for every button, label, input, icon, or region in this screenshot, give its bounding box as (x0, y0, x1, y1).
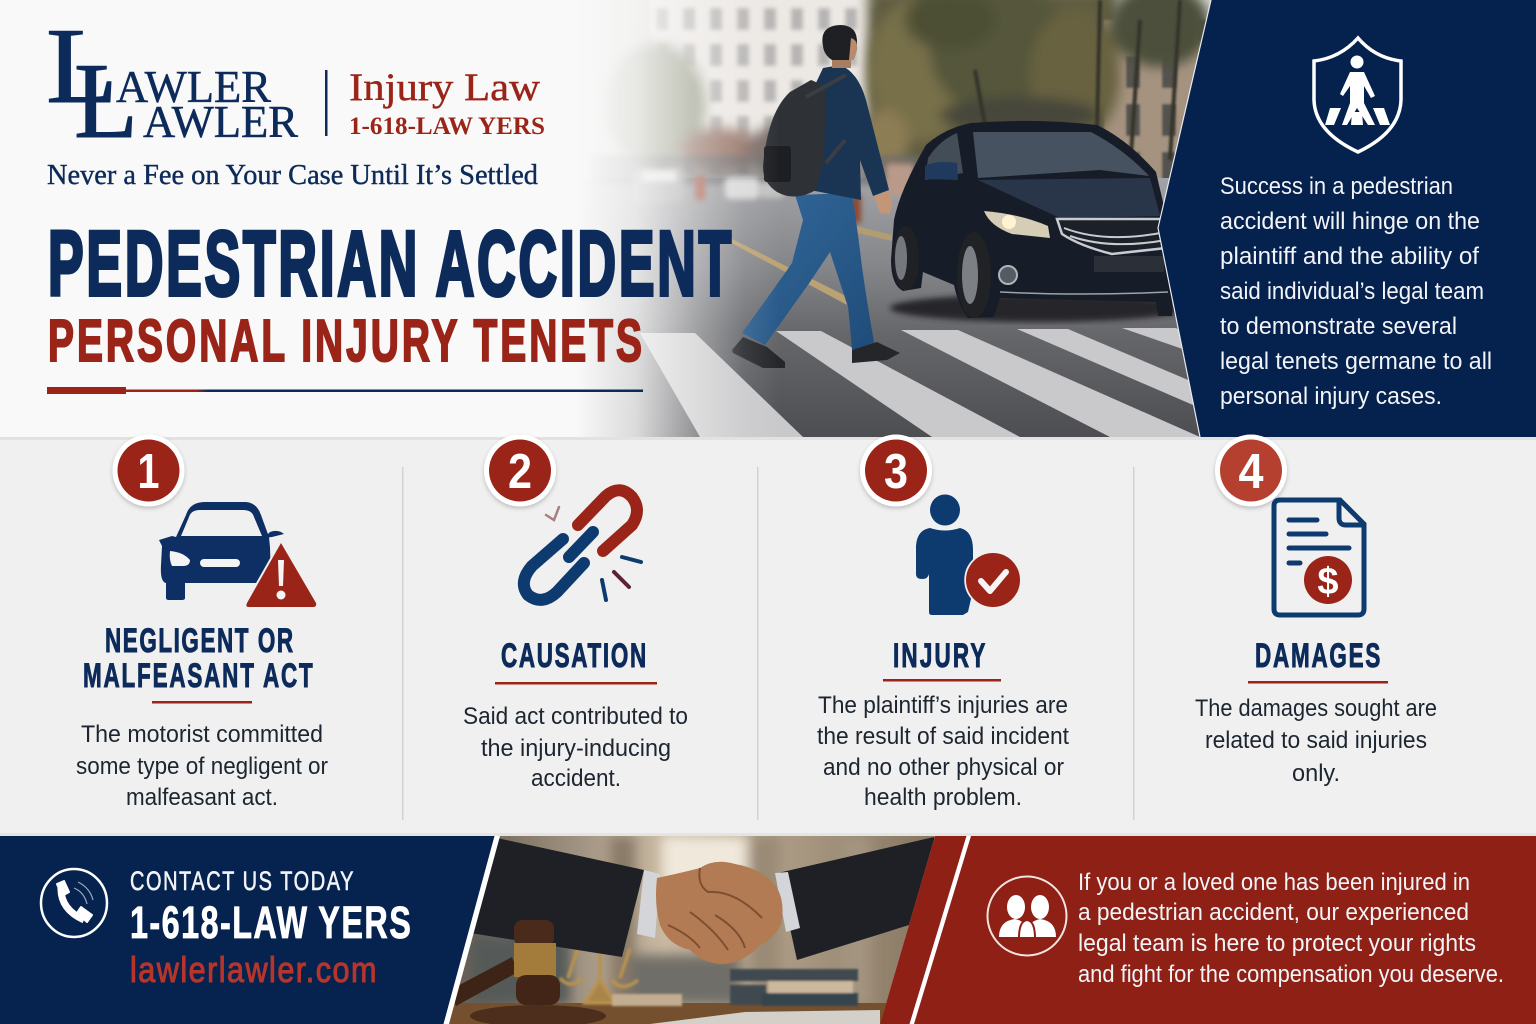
description (76, 721, 328, 811)
tenet panel top edge (0, 437, 1536, 440)
number badge 4: 4 (1238, 445, 1264, 499)
description (817, 692, 1069, 811)
tagline: Never a Fee on Your Case Until It’s Settled (47, 160, 538, 191)
intro paragraph: legal tenets germane to all (1220, 348, 1492, 375)
logo: Lawler Lawler: L (74, 42, 138, 161)
right sleeve (778, 837, 940, 960)
description: health problem. (864, 784, 1022, 811)
tenet 3: injury (817, 434, 1069, 811)
footer photo: handshake and gavel (440, 836, 940, 1024)
heading rule (152, 701, 252, 704)
heading rule (495, 682, 657, 684)
footer navy contact panel (0, 836, 497, 1024)
contact details: lawlerlawler.com (130, 951, 377, 991)
column dividers (402, 467, 1134, 820)
heading rule (883, 679, 1001, 682)
title: PERSONAL INJURY TENETS (48, 308, 642, 374)
logo: Lawler Lawler (46, 7, 545, 161)
description: malfeasant act. (126, 784, 278, 811)
description: only. (1292, 760, 1340, 787)
number badge 4 (1215, 434, 1287, 506)
left shirt cuff (637, 870, 660, 938)
hand (874, 191, 892, 214)
slash: white divider left (444, 836, 500, 1024)
number badge 1: 1 (138, 445, 160, 499)
number badge 1 (112, 434, 184, 506)
car (890, 121, 1190, 322)
tenet 1: negligent or malfeasant act (76, 434, 328, 811)
heading rule (1248, 681, 1388, 684)
description: Said act contributed to (463, 703, 688, 730)
intro paragraph (1220, 173, 1492, 410)
heading: DAMAGES (1255, 637, 1380, 675)
heading (83, 622, 313, 695)
icon: car with warning triangle (159, 502, 316, 607)
closing message: legal team is here to protect your rights (1078, 930, 1476, 957)
description: accident. (531, 765, 621, 792)
description: related to said injuries (1205, 727, 1427, 754)
intro paragraph: accident will hinge on the (1220, 208, 1480, 235)
desk (449, 1003, 886, 1024)
tenet 2: causation (463, 434, 688, 792)
description: The motorist committed (81, 721, 323, 748)
jeans (742, 193, 875, 350)
heading: MALFEASANT ACT (83, 657, 313, 695)
intro paragraph: said individual’s legal team (1220, 278, 1484, 305)
heading: INJURY (893, 637, 985, 675)
navy intro panel (1158, 0, 1536, 437)
photo fade into white (540, 0, 780, 437)
icon: document with dollar sign (1274, 500, 1364, 615)
paper on desk (650, 1010, 880, 1024)
closing message: and fight for the compensation you deserve. (1078, 961, 1504, 988)
description: some type of negligent or (76, 753, 328, 780)
number badge 3 (860, 434, 932, 506)
icon: family in circle (988, 876, 1066, 956)
photo backdrop: buildings, trees, street (540, 0, 1220, 437)
closing message: a pedestrian accident, our experienced (1078, 899, 1469, 926)
icon: phone in circle (41, 869, 107, 937)
intro paragraph: Success in a pedestrian (1220, 173, 1453, 200)
heading: NEGLIGENT OR (105, 622, 293, 660)
books (612, 969, 858, 1006)
icon: shield with pedestrian (1314, 38, 1401, 152)
hero panel background (0, 0, 1536, 438)
description (463, 703, 688, 792)
shoes (732, 337, 785, 368)
description: The plaintiff’s injuries are (818, 692, 1068, 719)
right shirt cuff (775, 872, 800, 932)
tenet 4: damages (1195, 434, 1437, 787)
number badge 2: 2 (508, 445, 532, 499)
footer top hairline (0, 833, 1536, 836)
road centre line (732, 239, 848, 306)
neck (832, 60, 851, 68)
panel edge line (1158, 0, 1211, 437)
contact details (130, 866, 411, 991)
title: PEDESTRIAN ACCIDENT (48, 212, 731, 315)
icon: document with dollar sign: $ (1317, 561, 1339, 603)
intro paragraph: personal injury cases. (1220, 383, 1442, 410)
icon: person with check mark (916, 494, 1020, 615)
title (48, 212, 731, 374)
left sleeve (470, 838, 644, 957)
closing message: If you or a loved one has been injured in (1078, 869, 1470, 896)
head and hair (822, 25, 857, 60)
number badge 3: 3 (884, 445, 908, 499)
description: and no other physical or (823, 754, 1064, 781)
jacket and arm (808, 65, 889, 200)
description: The damages sought are (1195, 695, 1437, 722)
backpack (763, 80, 826, 197)
intro paragraph: to demonstrate several (1220, 313, 1457, 340)
logo: Lawler Lawler: Injury Law (349, 66, 540, 109)
contact details: CONTACT US TODAY (130, 866, 354, 897)
closing message (1078, 869, 1504, 988)
clasped hands (656, 862, 783, 964)
logo: Lawler Lawler: AWLER (143, 97, 298, 147)
scales (560, 948, 638, 1003)
gavel (450, 920, 606, 1024)
hero photo: pedestrian crossing in front of car (540, 0, 1220, 437)
heading: CAUSATION (501, 637, 646, 675)
logo: Lawler Lawler: L (46, 7, 118, 126)
icon: broken chain link (524, 490, 641, 600)
intro paragraph: plaintiff and the ability of (1220, 243, 1479, 270)
logo: Lawler Lawler: AWLER (116, 62, 271, 112)
office backdrop (440, 836, 940, 1024)
contact details: 1-618-LAW YERS (130, 899, 411, 948)
pedestrian with backpack (732, 25, 900, 368)
slash: white divider right (910, 836, 971, 1024)
footer red panel (880, 836, 1536, 1024)
description (1195, 695, 1437, 787)
description: the result of said incident (817, 723, 1069, 750)
description: the injury-inducing (481, 735, 671, 762)
title rule (47, 387, 643, 394)
logo: Lawler Lawler: 1-618-LAW YERS (349, 113, 545, 140)
crosswalk stripes (640, 328, 1200, 437)
number badge 2 (484, 434, 556, 506)
